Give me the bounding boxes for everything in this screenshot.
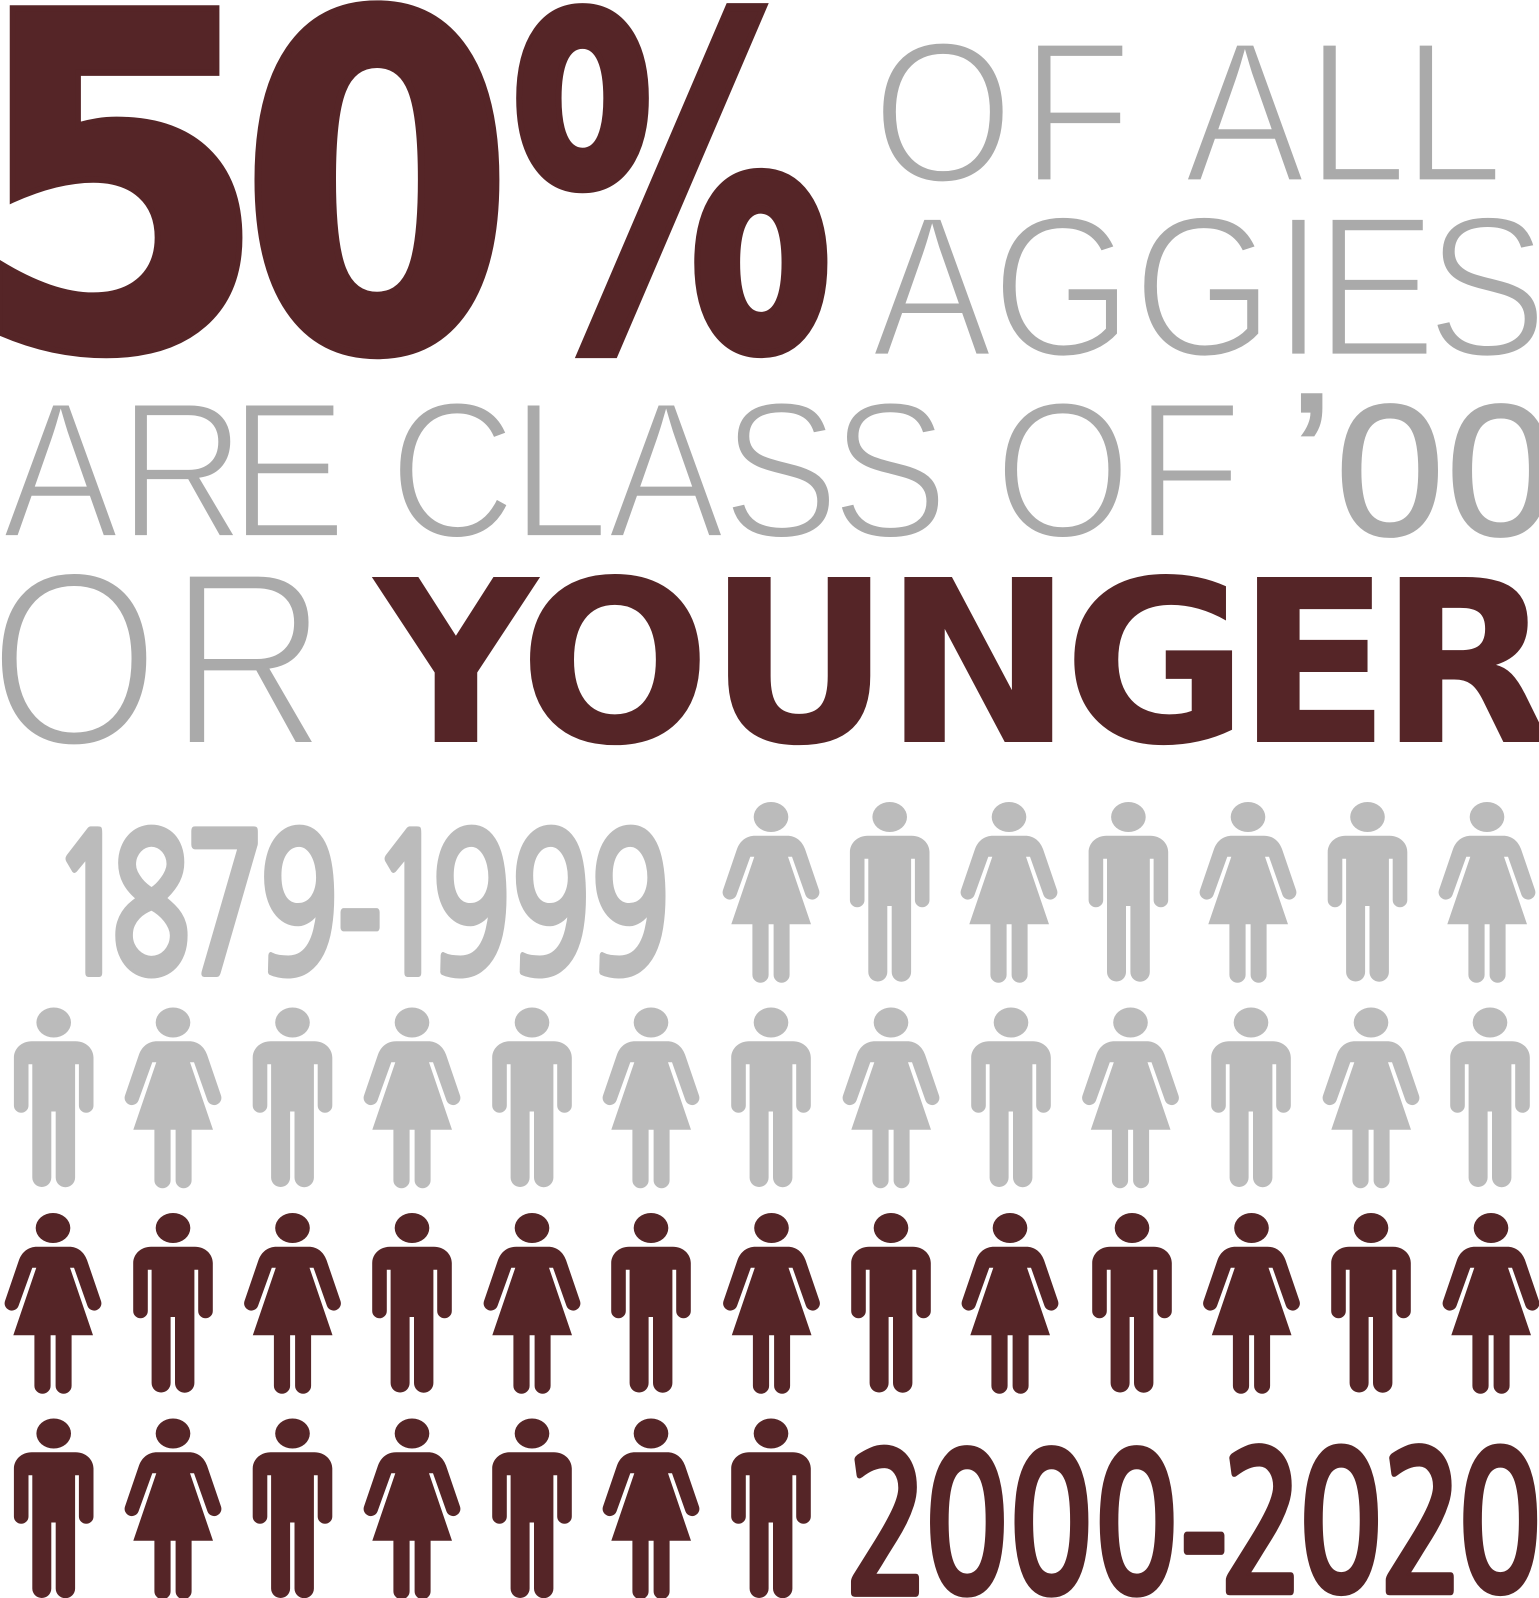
icon: man (372, 1213, 452, 1393)
text: OF ALL: OF ALL (872, 0, 1504, 225)
icon: woman (1082, 1008, 1179, 1188)
icon: man (133, 1213, 213, 1393)
icon: man (492, 1008, 572, 1187)
icon: man (731, 1008, 811, 1187)
people row 1: gray (723, 802, 1535, 983)
icon: woman (484, 1213, 580, 1394)
icon: man (1211, 1008, 1291, 1187)
icon: man (850, 802, 930, 982)
icon: woman (603, 1418, 699, 1598)
icon: man (1450, 1008, 1530, 1187)
icon: woman (364, 1418, 460, 1598)
icon: man (14, 1008, 94, 1187)
icon: woman (1323, 1008, 1419, 1188)
icon: man (1331, 1213, 1411, 1393)
icon: woman (603, 1008, 699, 1188)
people row 4: maroon (14, 1418, 811, 1598)
icon: woman (5, 1213, 101, 1394)
icon: man (14, 1418, 94, 1598)
icon: woman (125, 1418, 221, 1598)
people row 3: maroon (5, 1213, 1539, 1394)
icon: man (1328, 802, 1407, 982)
icon: man (253, 1418, 332, 1598)
icon: woman (364, 1008, 460, 1188)
icon: man (253, 1008, 332, 1187)
icon: man (971, 1008, 1051, 1187)
label: 1879-1999: 1879-1999 (49, 812, 672, 1026)
icon: man (851, 1213, 931, 1393)
icon: woman (843, 1008, 939, 1188)
icon: man (1089, 802, 1168, 982)
icon: man (731, 1418, 811, 1598)
icon: woman (1203, 1213, 1300, 1394)
icon: woman (1439, 802, 1535, 983)
text: AGGIES: AGGIES (871, 173, 1539, 399)
icon: man (1092, 1213, 1172, 1393)
icon: woman (961, 802, 1057, 983)
people row 2: gray (14, 1008, 1530, 1188)
icon: man (611, 1213, 691, 1393)
text: YOUNGER: YOUNGER (371, 533, 1539, 796)
icon: woman (125, 1008, 221, 1188)
text: apostrophe: ’ (1290, 361, 1333, 531)
icon: woman (962, 1213, 1058, 1394)
icon: man (492, 1418, 572, 1598)
icon: woman (1200, 802, 1296, 983)
icon: woman (723, 1213, 820, 1394)
icon: woman (244, 1213, 341, 1394)
icon: woman (1443, 1213, 1539, 1394)
text: ARE CLASS OF: ARE CLASS OF (2, 361, 1242, 580)
big stat: 50% (0, 0, 835, 459)
icon: woman (723, 802, 819, 983)
